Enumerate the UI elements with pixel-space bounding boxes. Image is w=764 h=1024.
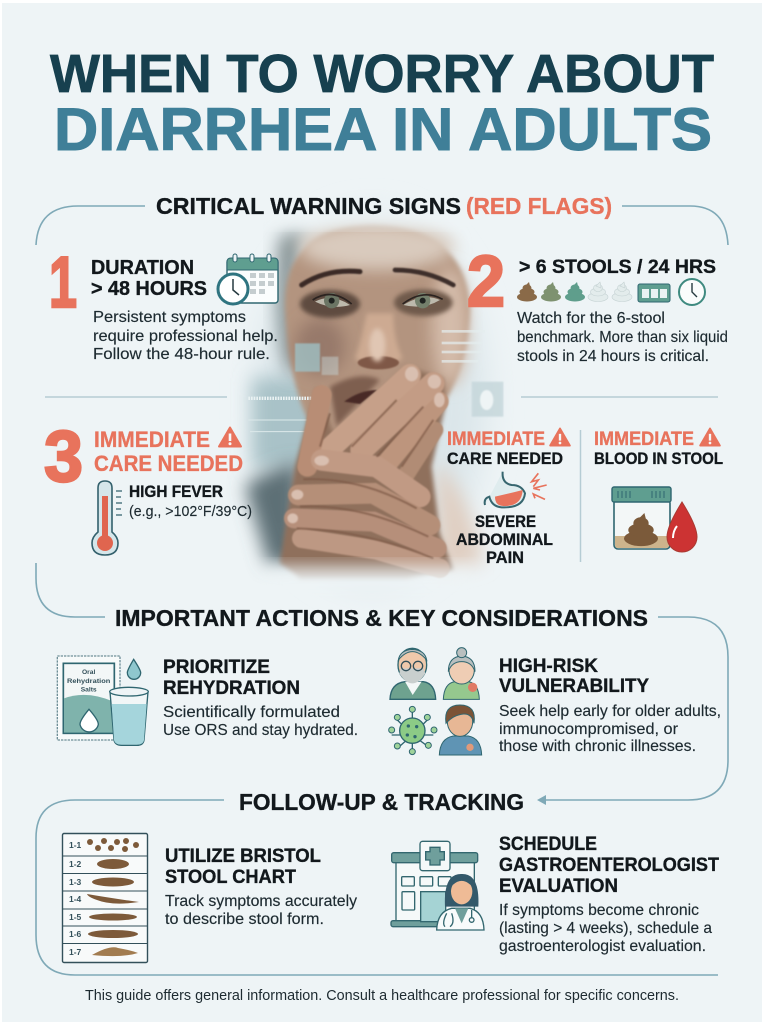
icon: oral rehydration salts and glass bbox=[57, 656, 148, 745]
sign 2: more than six stools: stools in 24 hours is critical. bbox=[517, 348, 709, 365]
sign: severe abdominal pain: CARE NEEDED bbox=[447, 449, 563, 468]
sign 2: more than six stools: 2 bbox=[467, 242, 505, 322]
title bbox=[50, 44, 714, 163]
sign 2: more than six stools: > 6 STOOLS / 24 HRS bbox=[519, 256, 716, 278]
sign: blood in stool bbox=[594, 428, 723, 552]
panel: high-risk vulnerability: immunocompromised, or bbox=[499, 721, 679, 738]
panel: bristol stool chart: UTILIZE BRISTOL bbox=[165, 846, 321, 867]
panel: schedule gastroenterologist evaluation bbox=[391, 834, 719, 955]
sign 3: high fever: HIGH FEVER bbox=[129, 482, 223, 501]
panel: schedule gastroenterologist evaluation: If symptoms become chronic bbox=[499, 902, 699, 919]
panel: bristol stool chart: to describe stool form. bbox=[165, 911, 324, 928]
icon: warning triangle bbox=[219, 428, 241, 446]
sign 2: more than six stools: Watch for the 6-stool bbox=[517, 310, 665, 327]
sign: severe abdominal pain: IMMEDIATE bbox=[447, 429, 545, 450]
sign 3: high fever: IMMEDIATE bbox=[94, 427, 210, 452]
sign 2: more than six stools: benchmark. More than six liquid bbox=[517, 329, 728, 346]
sign 1: duration: > 48 HOURS bbox=[91, 278, 207, 300]
panel: high-risk vulnerability: HIGH-RISK bbox=[499, 656, 598, 677]
footer disclaimer: This guide offers general information. Consult a healthcare professional for specific concerns. bbox=[85, 988, 679, 1004]
sign 1: duration bbox=[49, 243, 278, 363]
chart: bristol stool types: 1-2 bbox=[69, 859, 82, 869]
heading: critical warning signs: CRITICAL WARNING SIGNS bbox=[156, 193, 461, 219]
icon: vulnerable people and virus bbox=[389, 648, 482, 755]
icon: warning triangle bbox=[550, 428, 570, 446]
bracket lines: connecting flow to actions and follow-up bbox=[36, 563, 728, 975]
icon: stomach bbox=[485, 472, 547, 507]
heading: important actions: IMPORTANT ACTIONS & KEY CONSIDERATIONS bbox=[115, 605, 648, 631]
icon: oral rehydration salts and glass: Rehydration bbox=[67, 678, 110, 685]
sign 3: high fever: CARE NEEDED bbox=[94, 451, 243, 476]
sign 1: duration: require professional help. bbox=[93, 328, 278, 345]
panel: schedule gastroenterologist evaluation: SCHEDULE bbox=[499, 834, 597, 855]
sign: blood in stool: BLOOD IN STOOL bbox=[594, 449, 723, 468]
sign 1: duration: DURATION bbox=[91, 257, 194, 279]
sign 1: duration: 1 bbox=[49, 243, 77, 323]
panel: schedule gastroenterologist evaluation: gastroenterologist evaluation. bbox=[499, 938, 706, 955]
title: WHEN TO WORRY ABOUT bbox=[50, 44, 714, 104]
chart: bristol stool types: 1-4 bbox=[69, 894, 82, 904]
sign: severe abdominal pain bbox=[447, 428, 570, 567]
panel: prioritize rehydration: Use ORS and stay hydrated. bbox=[163, 722, 358, 739]
heading: critical warning signs: (RED FLAGS) bbox=[466, 193, 612, 219]
sign: blood in stool: IMMEDIATE bbox=[594, 429, 694, 450]
sign 2: more than six stools bbox=[467, 242, 728, 365]
sign 1: duration: Follow the 48-hour rule. bbox=[93, 346, 270, 363]
panel: prioritize rehydration: REHYDRATION bbox=[163, 678, 300, 699]
sign 3: high fever: (e.g., >102°F/39°C) bbox=[129, 503, 252, 520]
sign 3: high fever: 3 bbox=[44, 417, 83, 497]
icon: specimen jar with blood drop bbox=[612, 487, 697, 552]
panel: bristol stool chart bbox=[62, 834, 357, 962]
chart: bristol stool types: 1-1 bbox=[69, 840, 82, 850]
arrow bbox=[537, 795, 546, 805]
chart: bristol stool types: 1-5 bbox=[69, 912, 82, 922]
icon: warning triangle bbox=[700, 428, 720, 446]
chart: bristol stool types bbox=[62, 834, 148, 962]
sign: severe abdominal pain: PAIN bbox=[486, 548, 524, 567]
icon: calendar and clock bbox=[218, 254, 278, 304]
hands bbox=[280, 367, 453, 578]
panel: bristol stool chart: STOOL CHART bbox=[165, 867, 296, 888]
sign 3: high fever bbox=[44, 417, 252, 555]
sign: severe abdominal pain: ABDOMINAL bbox=[456, 530, 553, 549]
sign 1: duration: Persistent symptoms bbox=[93, 309, 246, 326]
panel: high-risk vulnerability: those with chronic illnesses. bbox=[499, 738, 696, 755]
photo: worried woman covering her mouth bbox=[245, 205, 503, 590]
heading: follow-up and tracking: FOLLOW-UP & TRACKING bbox=[239, 789, 524, 815]
dividers bbox=[45, 397, 718, 562]
chart: bristol stool types: 1-3 bbox=[69, 877, 82, 887]
icon: stool row, counter and clock bbox=[517, 279, 705, 305]
panel: high-risk vulnerability bbox=[389, 648, 721, 755]
icon: oral rehydration salts and glass: Salts bbox=[81, 687, 97, 694]
chart: bristol stool types: 1-6 bbox=[69, 929, 82, 939]
panel: prioritize rehydration: PRIORITIZE bbox=[163, 657, 270, 678]
icon: oral rehydration salts and glass: Oral bbox=[82, 669, 95, 676]
panel: schedule gastroenterologist evaluation: (lasting > 4 weeks), schedule a bbox=[499, 920, 712, 937]
panel: prioritize rehydration: Scientifically formulated bbox=[163, 704, 340, 721]
heading: critical warning signs bbox=[156, 193, 612, 219]
icon: thermometer bbox=[92, 481, 122, 555]
panel: high-risk vulnerability: Seek help early for older adults, bbox=[499, 703, 721, 720]
panel: high-risk vulnerability: VULNERABILITY bbox=[499, 676, 649, 697]
chart: bristol stool types: 1-7 bbox=[69, 947, 82, 957]
sign: severe abdominal pain: SEVERE bbox=[475, 512, 536, 531]
panel: bristol stool chart: Track symptoms accurately bbox=[165, 893, 357, 910]
panel: schedule gastroenterologist evaluation: EVALUATION bbox=[499, 876, 618, 897]
bracket lines: critical section top bbox=[36, 206, 728, 245]
title: DIARRHEA IN ADULTS bbox=[54, 96, 712, 163]
icon: hospital and doctor bbox=[391, 841, 484, 930]
panel: schedule gastroenterologist evaluation: GASTROENTEROLOGIST bbox=[499, 855, 719, 876]
panel: prioritize rehydration bbox=[57, 656, 358, 745]
